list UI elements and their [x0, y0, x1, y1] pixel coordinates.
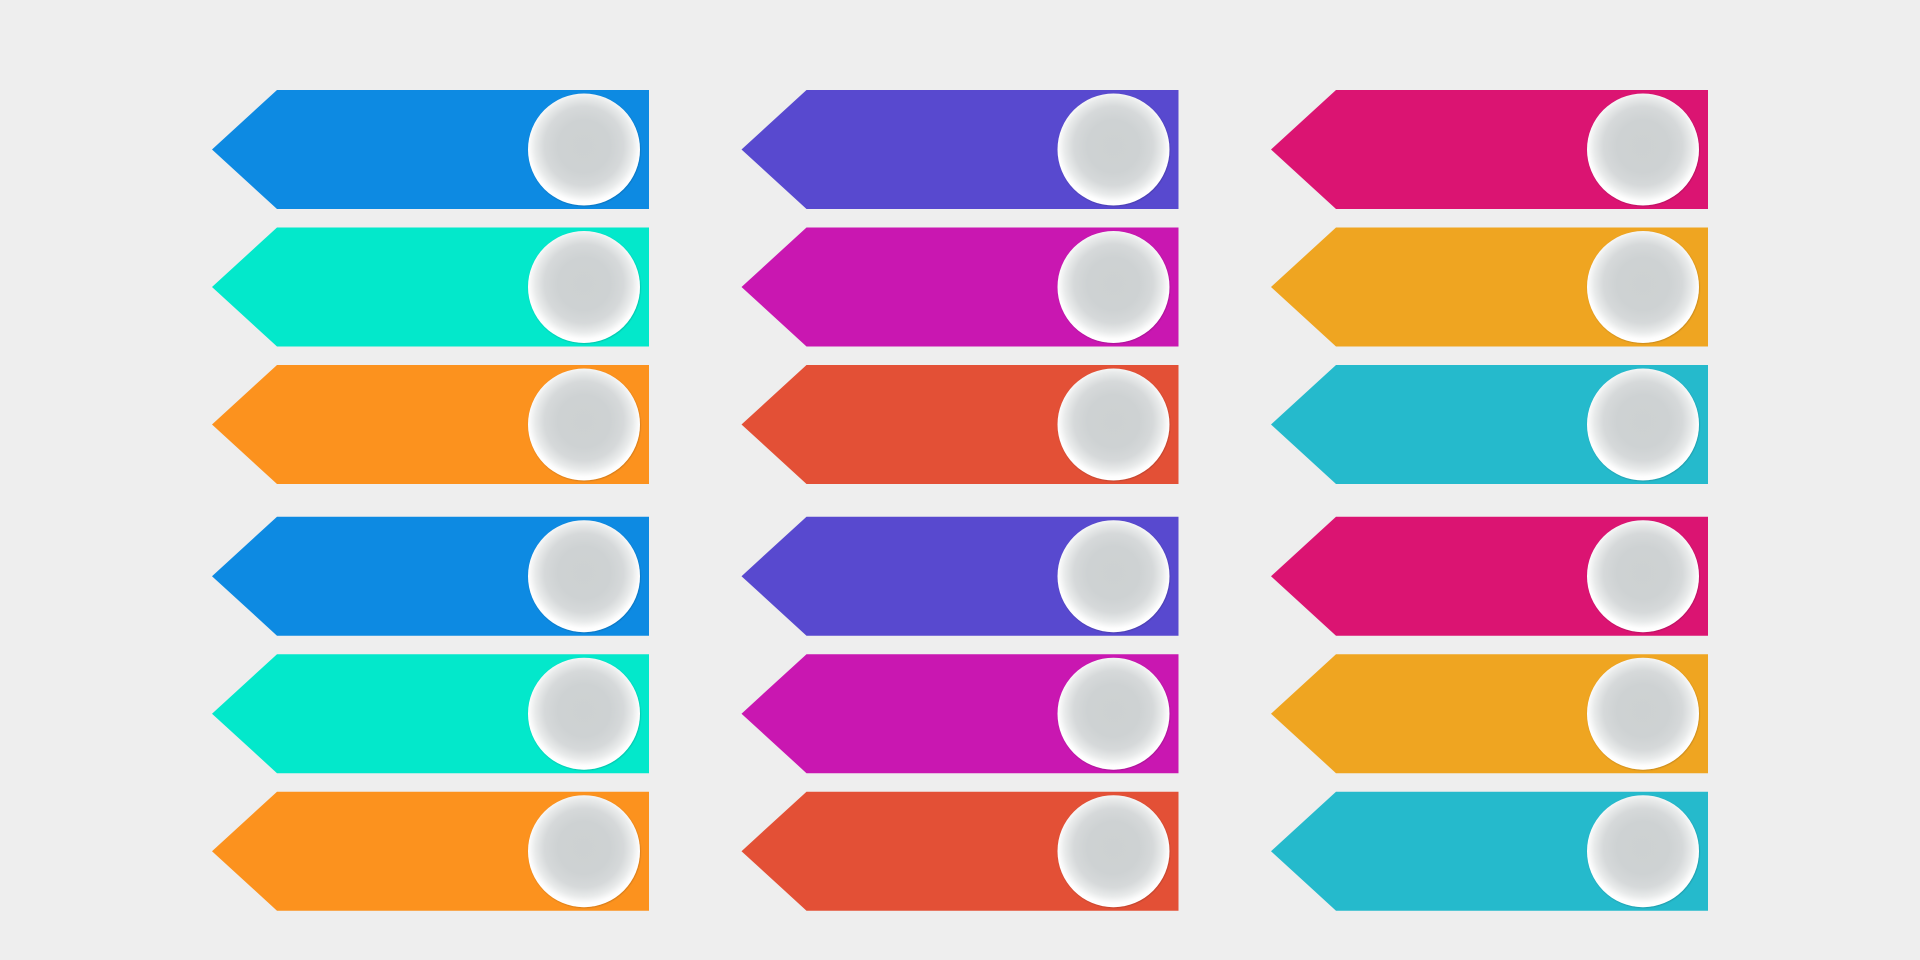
- banner: cyan: [1271, 792, 1708, 911]
- panel: right column, top group: [1271, 90, 1708, 484]
- banner: crimson: [1271, 517, 1708, 636]
- panel: middle column, bottom group: [742, 517, 1178, 911]
- banner: amber: [1271, 654, 1708, 773]
- banner: magenta: [742, 654, 1178, 773]
- banner: blue: [212, 90, 649, 209]
- banner: orange: [212, 792, 649, 911]
- panel: right column, bottom group: [1271, 517, 1708, 911]
- banner: magenta: [742, 228, 1178, 346]
- banner: red: [742, 365, 1178, 484]
- banner: blue: [212, 517, 649, 636]
- banner: purple: [742, 90, 1178, 209]
- banner: orange: [212, 365, 649, 484]
- banner: red: [742, 792, 1178, 911]
- banner: crimson: [1271, 90, 1708, 209]
- banner: purple: [742, 517, 1178, 636]
- banner: cyan: [1271, 365, 1708, 484]
- banner: teal: [212, 228, 649, 346]
- panel: middle column, top group: [742, 90, 1178, 484]
- banner: amber: [1271, 228, 1708, 346]
- panel: left column, bottom group: [212, 517, 649, 911]
- panel: left column, top group: [212, 90, 649, 484]
- banner: teal: [212, 654, 649, 773]
